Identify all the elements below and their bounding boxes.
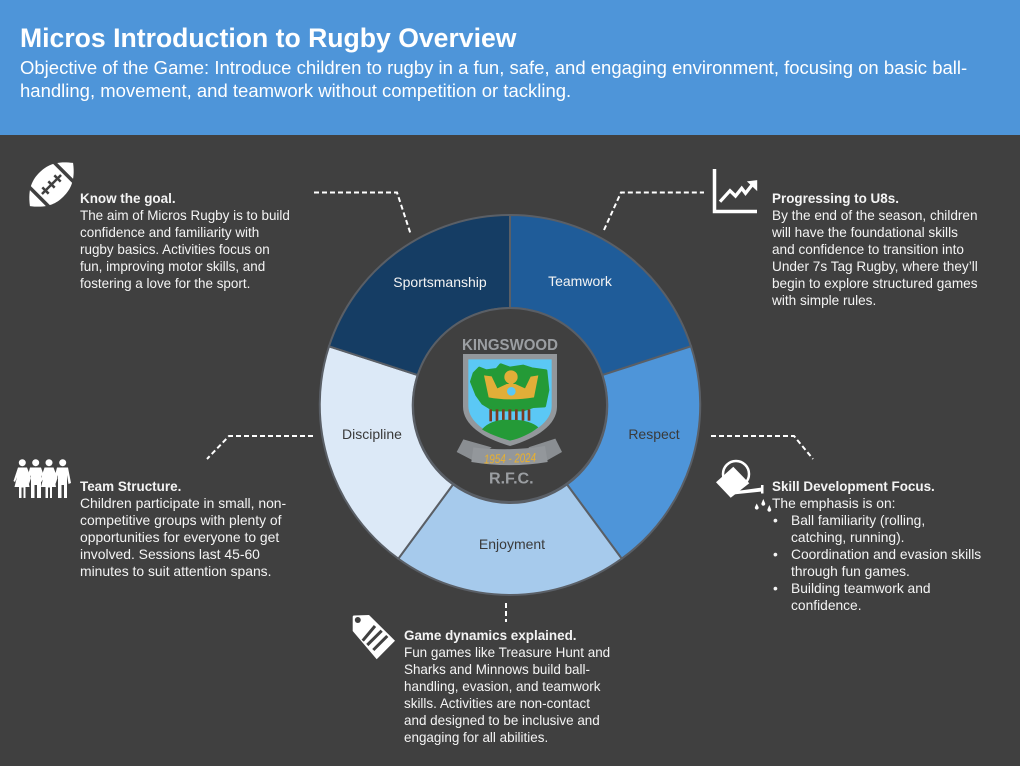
text: know the goal: confidence and familiarity with [80, 225, 259, 240]
text: team structure: opportunities for everyone to get [80, 529, 279, 545]
segment: Respect [567, 346, 700, 559]
text: team structure: Team Structure. [80, 479, 181, 494]
icon: watering can [716, 461, 771, 512]
text: progressing to U8s: By the end of the season, children [772, 208, 978, 223]
text: skill development focus: Coordination and evasion skills [791, 547, 981, 562]
text: progressing to U8s: with simple rules. [772, 293, 876, 308]
text: progressing to U8s: Progressing to U8s. [772, 191, 899, 206]
text: progressing to U8s: will have the foundational skills [772, 225, 958, 240]
objective text: Objective of the Game: Introduce children to rugby in a fun, safe, and engaging environment, focusing on basic ball- [20, 57, 967, 78]
text: know the goal: The aim of Micros Rugby is to build [80, 208, 290, 223]
text: know the goal: rugby basics. Activities focus on [80, 242, 270, 257]
text: team structure: minutes to suit attention spans. [80, 563, 272, 579]
text: game dynamics explained: Sharks and Minnows build ball- [404, 662, 590, 677]
text: progressing to U8s: Under 7s Tag Rugby, where they’ll [772, 259, 978, 274]
icon: price tag [353, 615, 395, 659]
text: progressing to U8s: begin to explore structured games [772, 276, 978, 291]
connector: Discipline [207, 436, 313, 459]
connector: Sportsmanship [314, 192, 411, 235]
text: skill development focus: Skill Development Focus. [772, 479, 935, 494]
text: know the goal: fostering a love for the sport. [80, 276, 250, 291]
text: skill development focus: through fun games. [791, 564, 910, 579]
segment: Respect: Respect [628, 426, 680, 442]
icon: team of people [14, 459, 71, 498]
text: skill development focus: • [773, 513, 778, 528]
text: game dynamics explained: handling, evasion, and teamwork [404, 679, 600, 694]
connector: Teamwork [604, 192, 704, 230]
text: skill development focus [772, 479, 981, 613]
text: skill development focus: Building teamwork and [791, 581, 931, 596]
header banner [0, 0, 1020, 135]
segment: Teamwork: Teamwork [548, 273, 613, 289]
text: game dynamics explained: Game dynamics explained. [404, 628, 577, 643]
text: team structure [80, 479, 286, 579]
text: skill development focus: confidence. [791, 598, 862, 613]
text: skill development focus: The emphasis is on: [772, 496, 895, 511]
centre circle [413, 308, 607, 502]
segment: Sportsmanship: Sportsmanship [393, 274, 487, 290]
text: skill development focus: Ball familiarity (rolling, [791, 513, 925, 528]
text: team structure: Children participate in small, non- [80, 495, 286, 511]
club crest [457, 337, 562, 487]
club crest: KINGSWOOD [462, 337, 558, 354]
icon: rugby ball [14, 147, 89, 222]
connector: Enjoyment [505, 603, 507, 622]
club crest: 1954 - 2024 [484, 451, 536, 467]
text: game dynamics explained: skills. Activities are non-contact [404, 696, 590, 711]
text: know the goal [80, 191, 290, 291]
text: skill development focus: catching, running). [791, 530, 905, 545]
text: team structure: competitive groups with plenty of [80, 512, 282, 528]
icon: growth chart [714, 169, 757, 212]
objective text: handling, movement, and teamwork without competition or tackling. [20, 80, 571, 101]
text: game dynamics explained [404, 628, 610, 745]
text: game dynamics explained: and designed to be inclusive and [404, 713, 600, 728]
text: team structure: involved. Sessions last 45-60 [80, 546, 260, 562]
text: skill development focus: • [773, 547, 778, 562]
text: game dynamics explained: Fun games like Treasure Hunt and [404, 645, 610, 660]
text: progressing to U8s: and confidence to transition into [772, 242, 964, 257]
segment: Discipline: Discipline [342, 426, 402, 442]
text: progressing to U8s [772, 191, 978, 308]
title: Micros Introduction to Rugby Overview [20, 23, 516, 53]
segment: Sportsmanship [329, 215, 510, 375]
segment: Enjoyment [398, 484, 622, 595]
text: skill development focus: • [773, 581, 778, 596]
segment: Discipline [320, 346, 453, 559]
text: game dynamics explained: engaging for all abilities. [404, 730, 548, 745]
segment: Teamwork [510, 215, 691, 375]
club crest: R.F.C. [489, 470, 534, 487]
objective text [20, 57, 967, 101]
connector: Respect [711, 436, 813, 459]
text: know the goal: Know the goal. [80, 191, 176, 206]
segment: Enjoyment: Enjoyment [479, 536, 545, 552]
text: know the goal: fun, improving motor skills, and [80, 259, 265, 274]
